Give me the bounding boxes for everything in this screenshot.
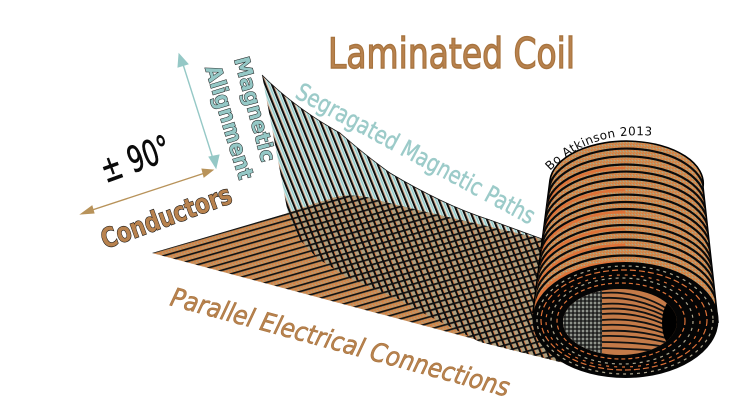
label: parallel electrical connections: Parallel Electrical Connections: [167, 283, 513, 404]
label: segregated magnetic paths: Segragated Magnetic Paths: [291, 78, 540, 230]
copper sheet: [152, 196, 600, 366]
arrow: magnetic alignment: [178, 54, 219, 168]
arrow: conductors: [81, 169, 213, 214]
magnetic sheet: [262, 75, 545, 260]
label: magnetic: Magnetic: [229, 54, 280, 165]
label: alignment: Alignment: [199, 62, 258, 183]
coil body: [533, 141, 718, 322]
coil front rings: [532, 262, 718, 378]
label: plus-minus 90 degrees: ± 90°: [95, 128, 177, 191]
overlap crosshatch: [288, 196, 600, 366]
illustration: laminated coil: [80, 35, 719, 396]
coil core: [563, 289, 677, 355]
title: Laminated Coil: [328, 29, 575, 78]
credit: Bo Atkinson 2013: [544, 126, 652, 170]
label: conductors: Conductors: [97, 180, 236, 256]
